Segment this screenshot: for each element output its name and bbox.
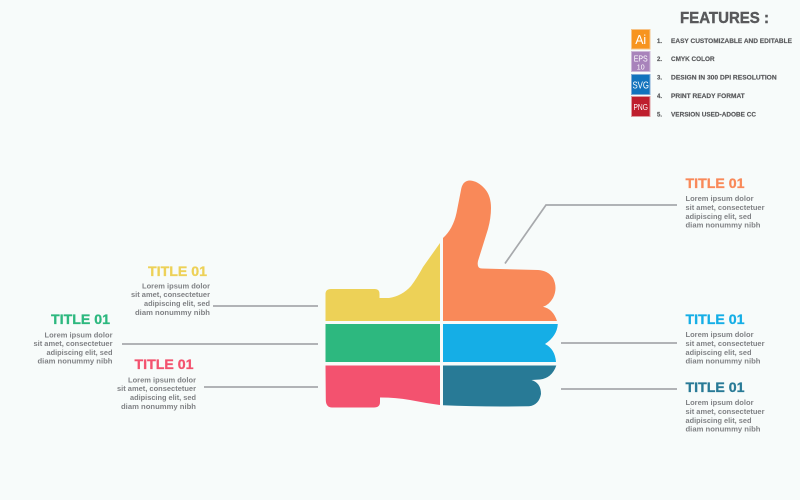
feature list: 5.	[657, 112, 662, 118]
feature list: CMYK COLOR	[671, 57, 715, 63]
text block: green	[34, 311, 113, 366]
text block: pink	[117, 356, 196, 411]
feature list: PRINT READY FORMAT	[671, 94, 745, 100]
text block: blue: Lorem ipsum dolor	[686, 330, 754, 339]
connector: orange	[505, 205, 677, 264]
connector: yellow	[213, 305, 318, 307]
feature list: 2.	[657, 57, 662, 63]
icon: Ai: Ai	[635, 33, 646, 47]
text block: orange: diam nonummy nibh	[686, 220, 761, 230]
feature list: 3.	[657, 76, 662, 82]
thumbs-up hand	[326, 180, 558, 408]
text block: yellow: sit amet, consectetuer	[131, 290, 210, 299]
text block: blue: adipiscing elit, sed	[686, 348, 752, 357]
icon: EPS	[632, 52, 650, 72]
text block: blue: TITLE 01	[686, 311, 745, 327]
text block: teal: adipiscing elit, sed	[686, 416, 752, 425]
text block: yellow: Lorem ipsum dolor	[142, 281, 210, 290]
text block: teal	[686, 379, 765, 434]
text block: yellow: TITLE 01	[148, 263, 207, 279]
text block: green: sit amet, consectetuer	[34, 339, 113, 348]
text block: orange: sit amet, consectetuer	[686, 203, 765, 212]
features panel	[632, 10, 792, 118]
text block: orange: adipiscing elit, sed	[686, 212, 752, 221]
text block: orange: TITLE 01	[686, 175, 745, 191]
segment: yellow	[326, 243, 440, 321]
text block: pink: diam nonummy nibh	[121, 402, 196, 411]
text block: pink: sit amet, consectetuer	[117, 384, 196, 393]
connector: teal	[561, 388, 677, 390]
feature list	[657, 39, 792, 118]
feature list: 1.	[657, 39, 662, 45]
feature list: EASY CUSTOMIZABLE AND EDITABLE	[671, 39, 792, 45]
segment: orange	[443, 180, 557, 321]
feature list: 4.	[657, 94, 662, 100]
text block: green: adipiscing elit, sed	[46, 348, 113, 357]
icon: SVG: SVG	[632, 80, 649, 92]
text block: teal: sit amet, consectetuer	[686, 407, 765, 416]
segment: blue	[443, 324, 558, 362]
text block: green: TITLE 01	[51, 311, 110, 327]
text block: yellow	[131, 263, 210, 317]
text block: yellow: diam nonummy nibh	[135, 308, 210, 317]
text block: blue: sit amet, consectetuer	[686, 339, 765, 348]
connector: pink	[204, 386, 318, 388]
text block: orange: Lorem ipsum dolor	[686, 194, 754, 203]
icon: EPS: 10	[637, 64, 645, 72]
text block: blue: diam nonummy nibh	[686, 356, 761, 366]
text block: pink: adipiscing elit, sed	[130, 393, 196, 402]
icon: PNG	[632, 96, 650, 116]
icon: PNG: PNG	[633, 103, 648, 112]
text block: orange	[686, 175, 765, 230]
text block: teal: Lorem ipsum dolor	[686, 398, 754, 407]
connector: blue	[561, 342, 677, 344]
connector: green	[122, 343, 318, 345]
feature list: DESIGN IN 300 DPI RESOLUTION	[671, 76, 777, 82]
icon: EPS: EPS	[634, 54, 648, 64]
icon: SVG	[632, 74, 650, 94]
segment: green	[326, 324, 440, 362]
text block: yellow: adipiscing elit, sed	[144, 299, 210, 308]
features heading: FEATURES :	[680, 10, 769, 27]
segment: pink	[326, 366, 440, 408]
feature list: VERSION USED-ADOBE CC	[671, 112, 757, 118]
text block: teal: TITLE 01	[686, 379, 745, 395]
text block: pink: Lorem ipsum dolor	[128, 376, 196, 384]
text block: pink: TITLE 01	[134, 356, 194, 372]
text block: teal: diam nonummy nibh	[686, 424, 761, 434]
segment: teal	[443, 366, 556, 407]
text block: blue	[686, 311, 765, 366]
icon: Ai	[632, 30, 650, 49]
text block: green: Lorem ipsum dolor	[44, 330, 113, 339]
text block: green: diam nonummy nibh	[38, 356, 113, 366]
